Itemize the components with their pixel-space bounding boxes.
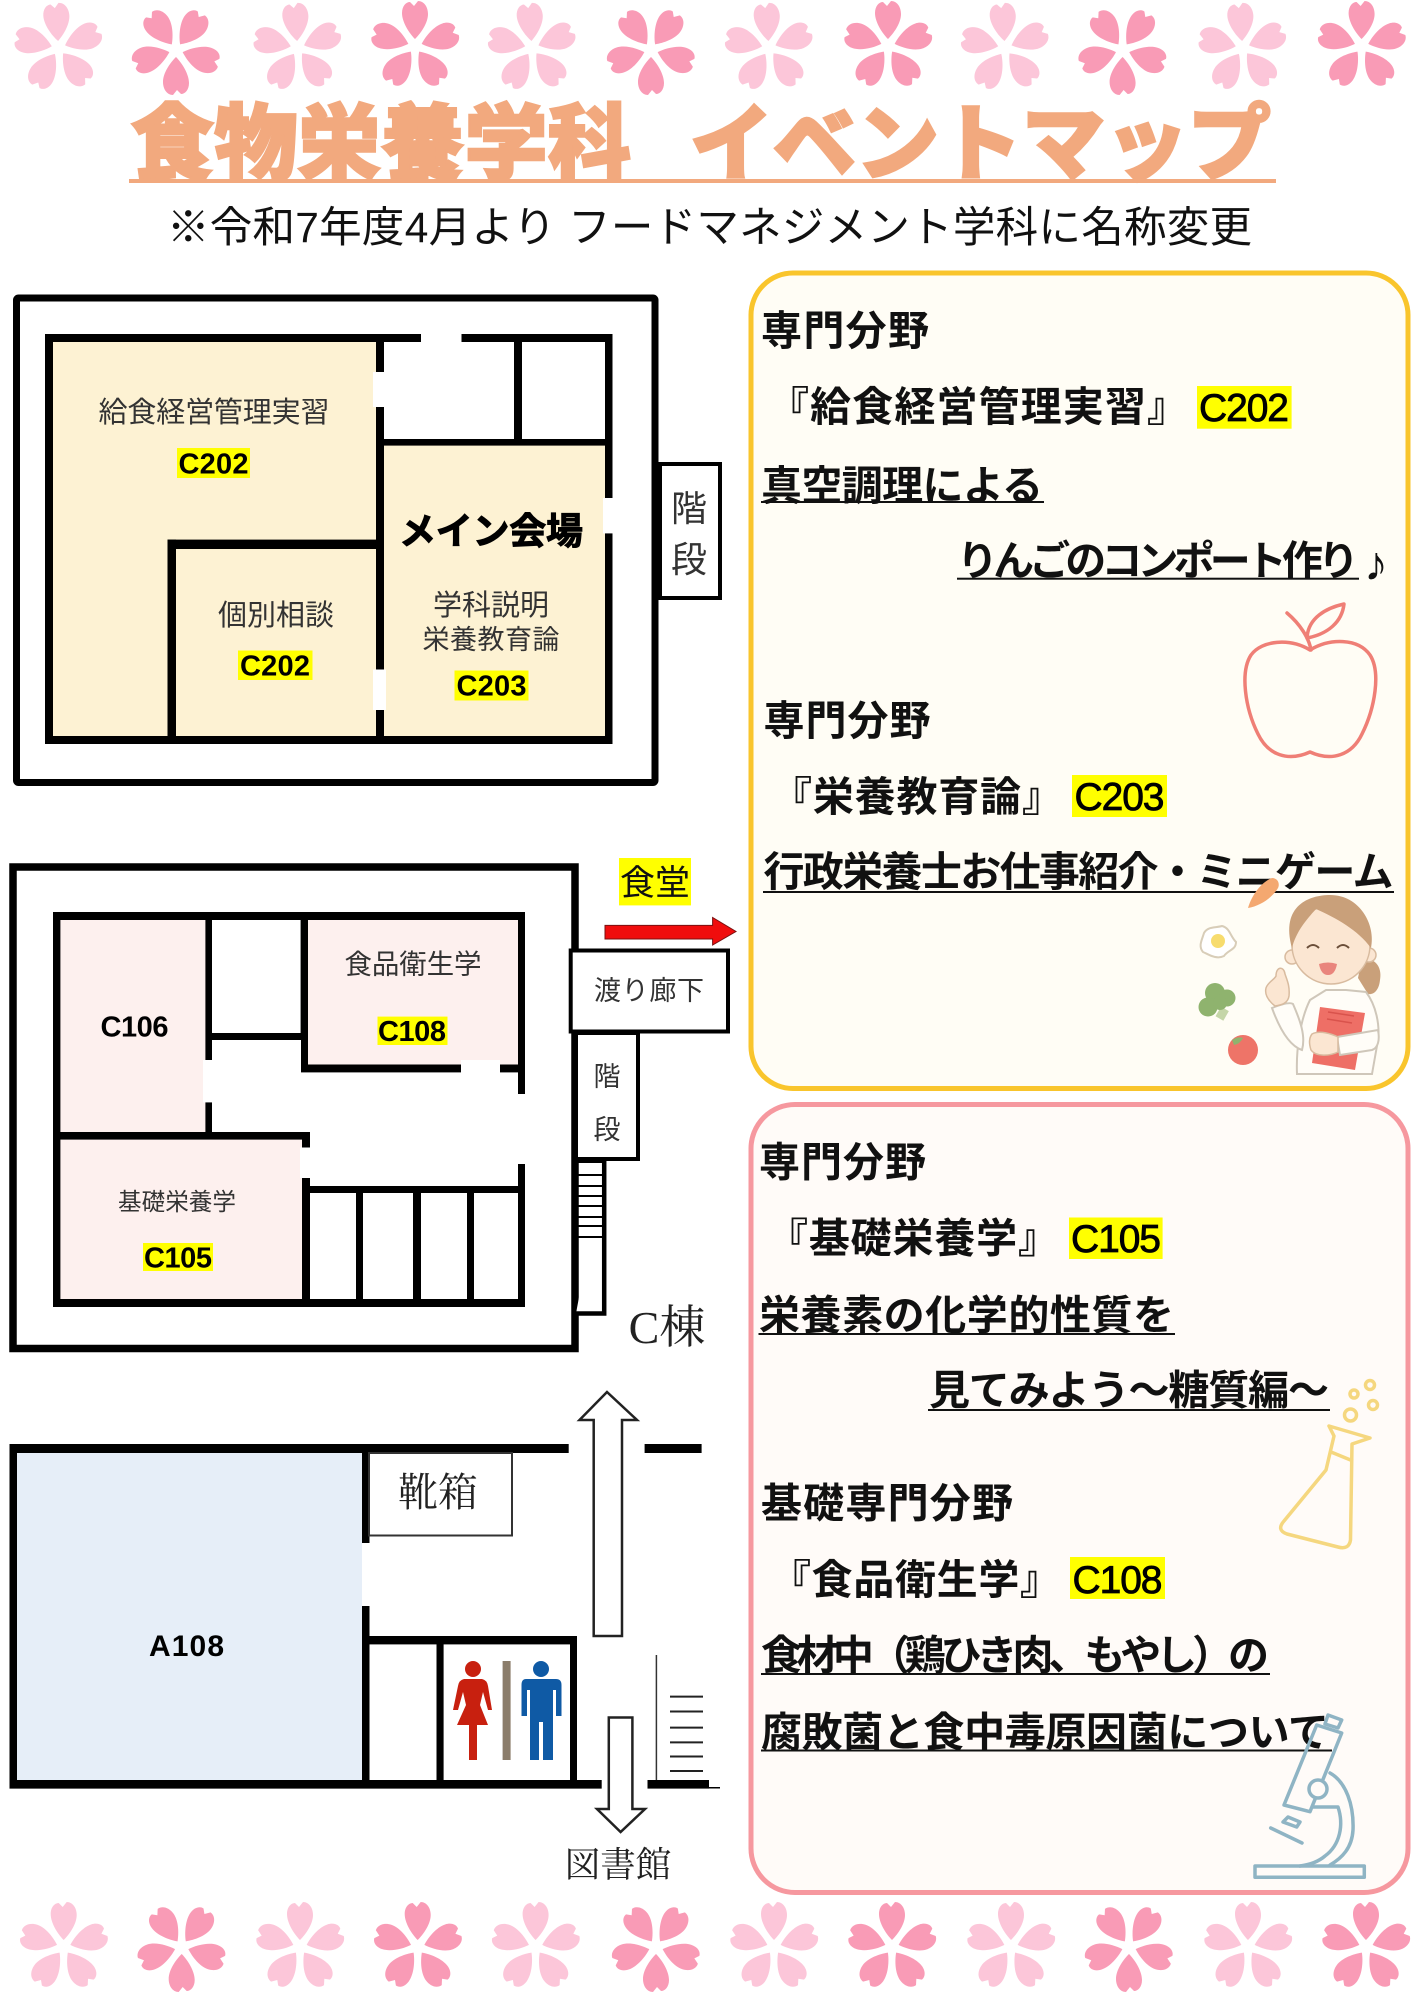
title: 食物栄養学科 [131, 98, 631, 191]
room: A108: A108 [149, 1630, 224, 1663]
stairs: 階 [594, 1062, 620, 1092]
room: C202 kitchen practice [98, 396, 330, 480]
floor plan: first floor [13, 858, 736, 1353]
label: library: 図書館 [565, 1844, 671, 1884]
icon: restroom [453, 1661, 562, 1760]
event: food service management practice: りんごのコンポート作り [957, 538, 1359, 584]
room: individual consultation: 個別相談 [218, 599, 334, 632]
panel: first floor events [751, 1104, 1408, 1892]
room: food hygiene C108: 食品衛生学 [344, 948, 482, 980]
room: C202 kitchen practice: C202 [178, 448, 248, 480]
room: main venue C203: メイン会場 [399, 511, 583, 552]
event: food service management practice [761, 308, 1388, 591]
event: food hygiene: C108 [1072, 1559, 1162, 1602]
stairs [576, 1033, 638, 1314]
stairs [660, 464, 720, 598]
label: cafeteria: 食堂 [620, 864, 690, 903]
stairs: 段 [671, 539, 707, 580]
shoe rack: 靴箱 [398, 1470, 478, 1515]
figure: woman in lab coat [1266, 895, 1380, 1074]
connecting corridor: 渡り廊下 [594, 976, 704, 1006]
event: food hygiene: 腐敗菌と食中毒原因菌について [761, 1710, 1329, 1756]
icon: microscope [1255, 1715, 1364, 1877]
room: basic nutrition C105: 基礎栄養学 [118, 1189, 236, 1216]
event: basic nutrition: 専門分野 [759, 1140, 926, 1186]
room: main venue C203: 栄養教育論 [422, 625, 560, 655]
event: food service management practice: C202 [1199, 387, 1289, 430]
illustration: nutritionist with food [1198, 878, 1380, 1074]
shoe rack [369, 1453, 512, 1536]
event: basic nutrition [758, 1140, 1330, 1414]
icon: fried egg [1201, 926, 1236, 957]
event: food hygiene: 食材中（鶏ひき肉、もやし）の [761, 1632, 1269, 1678]
panel: second floor events [751, 273, 1408, 1088]
icon: tomato [1228, 1035, 1258, 1065]
room: food hygiene C108 [344, 948, 482, 1048]
floor plan: second floor [16, 298, 720, 782]
icon: broccoli [1198, 983, 1236, 1021]
room: basic nutrition C105 [118, 1189, 236, 1274]
event: food service management practice: 『給食経営管理実習』 [768, 384, 1188, 430]
stairs: 階 [671, 488, 707, 529]
arrow: red, to cafeteria [605, 918, 736, 945]
event: nutrition education [763, 698, 1394, 895]
connecting corridor [571, 950, 728, 1032]
event: food service management practice: ♪ [1364, 538, 1388, 591]
event: food service management practice: 真空調理による [761, 463, 1043, 509]
event: nutrition education: C203 [1074, 776, 1164, 819]
event: basic nutrition: C105 [1071, 1218, 1161, 1261]
room: C202 kitchen practice: 給食経営管理実習 [98, 396, 330, 429]
event: basic nutrition: 『基礎栄養学』 [767, 1216, 1059, 1262]
event: basic nutrition: 見てみよう～糖質編～ [929, 1368, 1329, 1414]
event: food hygiene [761, 1480, 1332, 1756]
event: food hygiene: 基礎専門分野 [761, 1480, 1013, 1526]
event: nutrition education: 行政栄養士お仕事紹介・ミニゲーム [764, 849, 1394, 895]
stairs: A building [656, 1655, 703, 1780]
label: C building: C棟 [629, 1302, 705, 1353]
room: basic nutrition C105: C105 [144, 1242, 212, 1274]
arrow: down to library [597, 1718, 645, 1832]
event: basic nutrition: 栄養素の化学的性質を [759, 1292, 1174, 1338]
room: C106: C106 [100, 1012, 168, 1044]
title: イベントマップ [690, 98, 1271, 191]
title [129, 98, 1276, 191]
room: main venue C203: C203 [456, 670, 526, 702]
cherry blossom border: bottom [17, 1902, 1413, 1992]
event: nutrition education: 専門分野 [764, 698, 930, 744]
event: nutrition education: 『栄養教育論』 [771, 774, 1063, 820]
floor plan: A building entrance [10, 1392, 720, 1884]
cherry blossom border: top [9, 0, 1408, 95]
stairs: 段 [594, 1115, 620, 1145]
room: food hygiene C108: C108 [378, 1016, 446, 1048]
room: main venue C203 [399, 511, 583, 702]
icon: flask [1281, 1380, 1378, 1548]
arrow: up to C building [580, 1392, 637, 1636]
room: main venue C203: 学科説明 [433, 589, 549, 622]
room: individual consultation: C202 [240, 650, 310, 682]
subtitle: name change notice: ※令和7年度4月より フードマネジメント学科に名称変更 [167, 205, 1252, 252]
event: food service management practice: 専門分野 [761, 308, 929, 354]
room: individual consultation [218, 599, 334, 682]
event: food hygiene: 『食品衛生学』 [770, 1557, 1061, 1603]
icon: apple [1245, 604, 1376, 756]
icon: carrot [1248, 878, 1279, 908]
